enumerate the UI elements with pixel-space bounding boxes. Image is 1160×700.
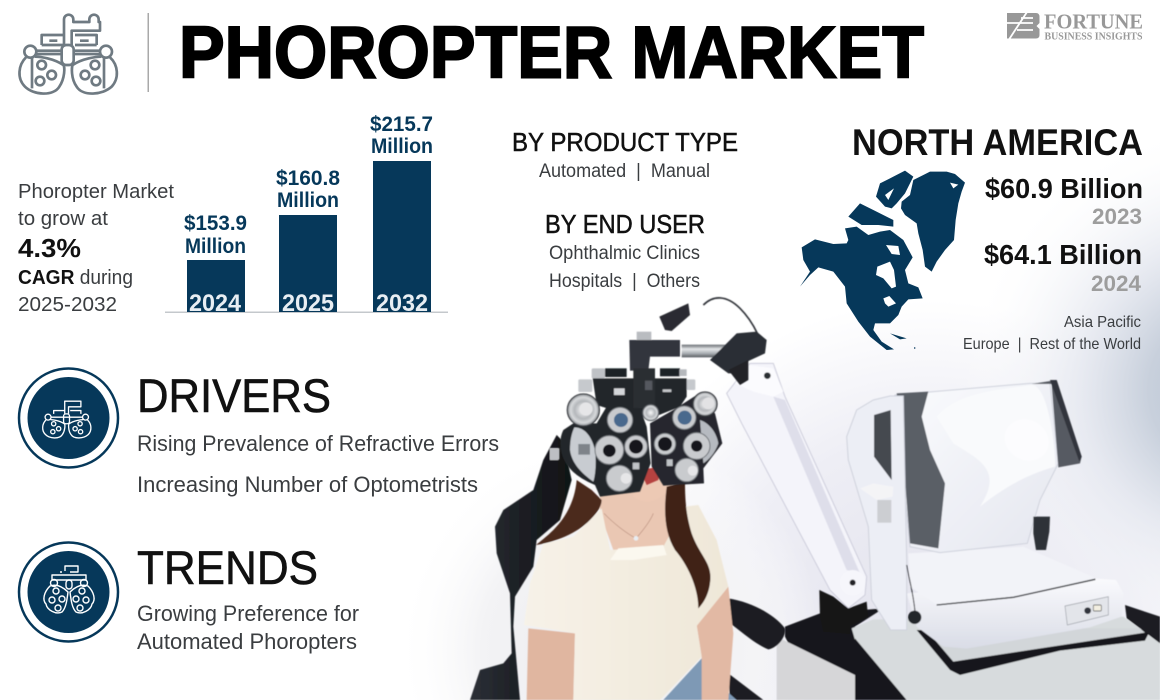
lamp cable	[703, 298, 757, 333]
segment: by product type: Automated | Manual	[539, 161, 710, 182]
drivers list	[137, 431, 499, 497]
segment: by end user: BY END USER	[545, 209, 705, 239]
header icon: phoropter outline	[19, 15, 117, 94]
center plate	[593, 378, 687, 417]
region values: $64.1 Billion	[984, 239, 1142, 270]
region values: 2023	[1092, 204, 1142, 229]
icon: trends	[19, 542, 118, 642]
neck	[600, 487, 687, 550]
title: PHOROPTER MARKET	[179, 12, 924, 94]
bar 2024: $153.9	[184, 212, 247, 235]
growth text	[18, 181, 174, 316]
trends list: Automated Phoropters	[137, 629, 357, 654]
tray	[917, 629, 1148, 675]
arms	[527, 628, 575, 700]
dark strip	[897, 392, 945, 548]
region values: 2024	[1091, 271, 1142, 296]
photo: autorefractor on table	[727, 363, 1160, 700]
icon: drivers	[19, 368, 118, 468]
speckled table	[852, 617, 1160, 700]
top bars	[605, 368, 627, 377]
dark table top	[785, 608, 883, 700]
bar 2032: Million	[371, 135, 433, 158]
growth text: Phoropter Market	[18, 181, 174, 203]
lips	[640, 467, 660, 485]
necklace	[604, 513, 653, 538]
viewing windows	[570, 427, 596, 482]
growth text: 2025-2032	[18, 294, 117, 316]
control panel	[1065, 597, 1108, 625]
instrument base	[907, 578, 1123, 649]
photo: patient	[470, 435, 785, 700]
region values: $60.9 Billion	[985, 173, 1143, 204]
post	[629, 340, 680, 371]
segment: by product type: BY PRODUCT TYPE	[512, 127, 738, 157]
lens rims	[595, 406, 710, 491]
logo: Fortune Business Insights	[1007, 10, 1143, 42]
joystick	[1033, 517, 1050, 550]
support arm	[727, 363, 867, 608]
top dials	[567, 392, 717, 426]
other regions	[963, 314, 1141, 353]
trends list	[137, 601, 359, 654]
instrument head	[895, 383, 1058, 553]
jeans	[663, 658, 737, 700]
other regions: Europe | Rest of the World	[963, 336, 1141, 353]
small center knob	[643, 405, 659, 421]
bar 2024: Million	[185, 235, 246, 258]
left housing	[560, 407, 651, 497]
bar 2025: 2025	[282, 290, 334, 317]
segment: by end user	[545, 209, 705, 292]
bar 2025: Million	[277, 189, 339, 212]
other regions: Asia Pacific	[1064, 314, 1141, 331]
segment: by end user: Hospitals | Others	[549, 271, 700, 292]
chair	[470, 435, 572, 700]
bar 2025	[276, 167, 340, 317]
pedestal	[819, 590, 868, 634]
drivers list: Increasing Number of Optometrists	[137, 472, 478, 497]
right housing	[650, 395, 722, 486]
growth text: to grow at	[18, 208, 108, 230]
bar 2024: 2024	[189, 290, 242, 317]
tube	[682, 345, 740, 357]
drivers heading: DRIVERS	[137, 369, 331, 422]
lens centers	[614, 413, 628, 427]
display	[1032, 380, 1082, 467]
bar 2032: 2032	[376, 290, 428, 317]
region values	[984, 173, 1143, 296]
segment: by end user: Ophthalmic Clinics	[549, 243, 700, 264]
lamp head	[659, 303, 690, 331]
trends list: Growing Preference for	[137, 601, 359, 626]
logo: Fortune Business Insights: BUSINESS INSIGHTS	[1044, 32, 1143, 42]
map: North America	[800, 171, 965, 350]
bar 2032	[370, 113, 433, 317]
bar 2032: $215.7	[370, 113, 433, 136]
photo: phoropter and lamp	[550, 298, 767, 497]
arm rest	[728, 598, 785, 649]
logo: Fortune Business Insights: FORTUNE	[1044, 10, 1143, 34]
growth text: 4.3%	[18, 233, 81, 263]
bar 2024	[184, 212, 247, 317]
drivers list: Rising Prevalence of Refractive Errors	[137, 431, 499, 456]
bar 2025: $160.8	[276, 167, 340, 190]
growth text: CAGR during	[18, 267, 133, 289]
cabinet	[777, 637, 855, 700]
segment: by product type	[512, 127, 738, 182]
chin rest frame	[847, 396, 907, 630]
trends heading: TRENDS	[137, 541, 318, 594]
header divider	[148, 13, 149, 92]
region heading: NORTH AMERICA	[852, 122, 1143, 163]
shirt	[524, 505, 728, 700]
bar chart	[165, 113, 448, 317]
hair	[536, 480, 602, 545]
